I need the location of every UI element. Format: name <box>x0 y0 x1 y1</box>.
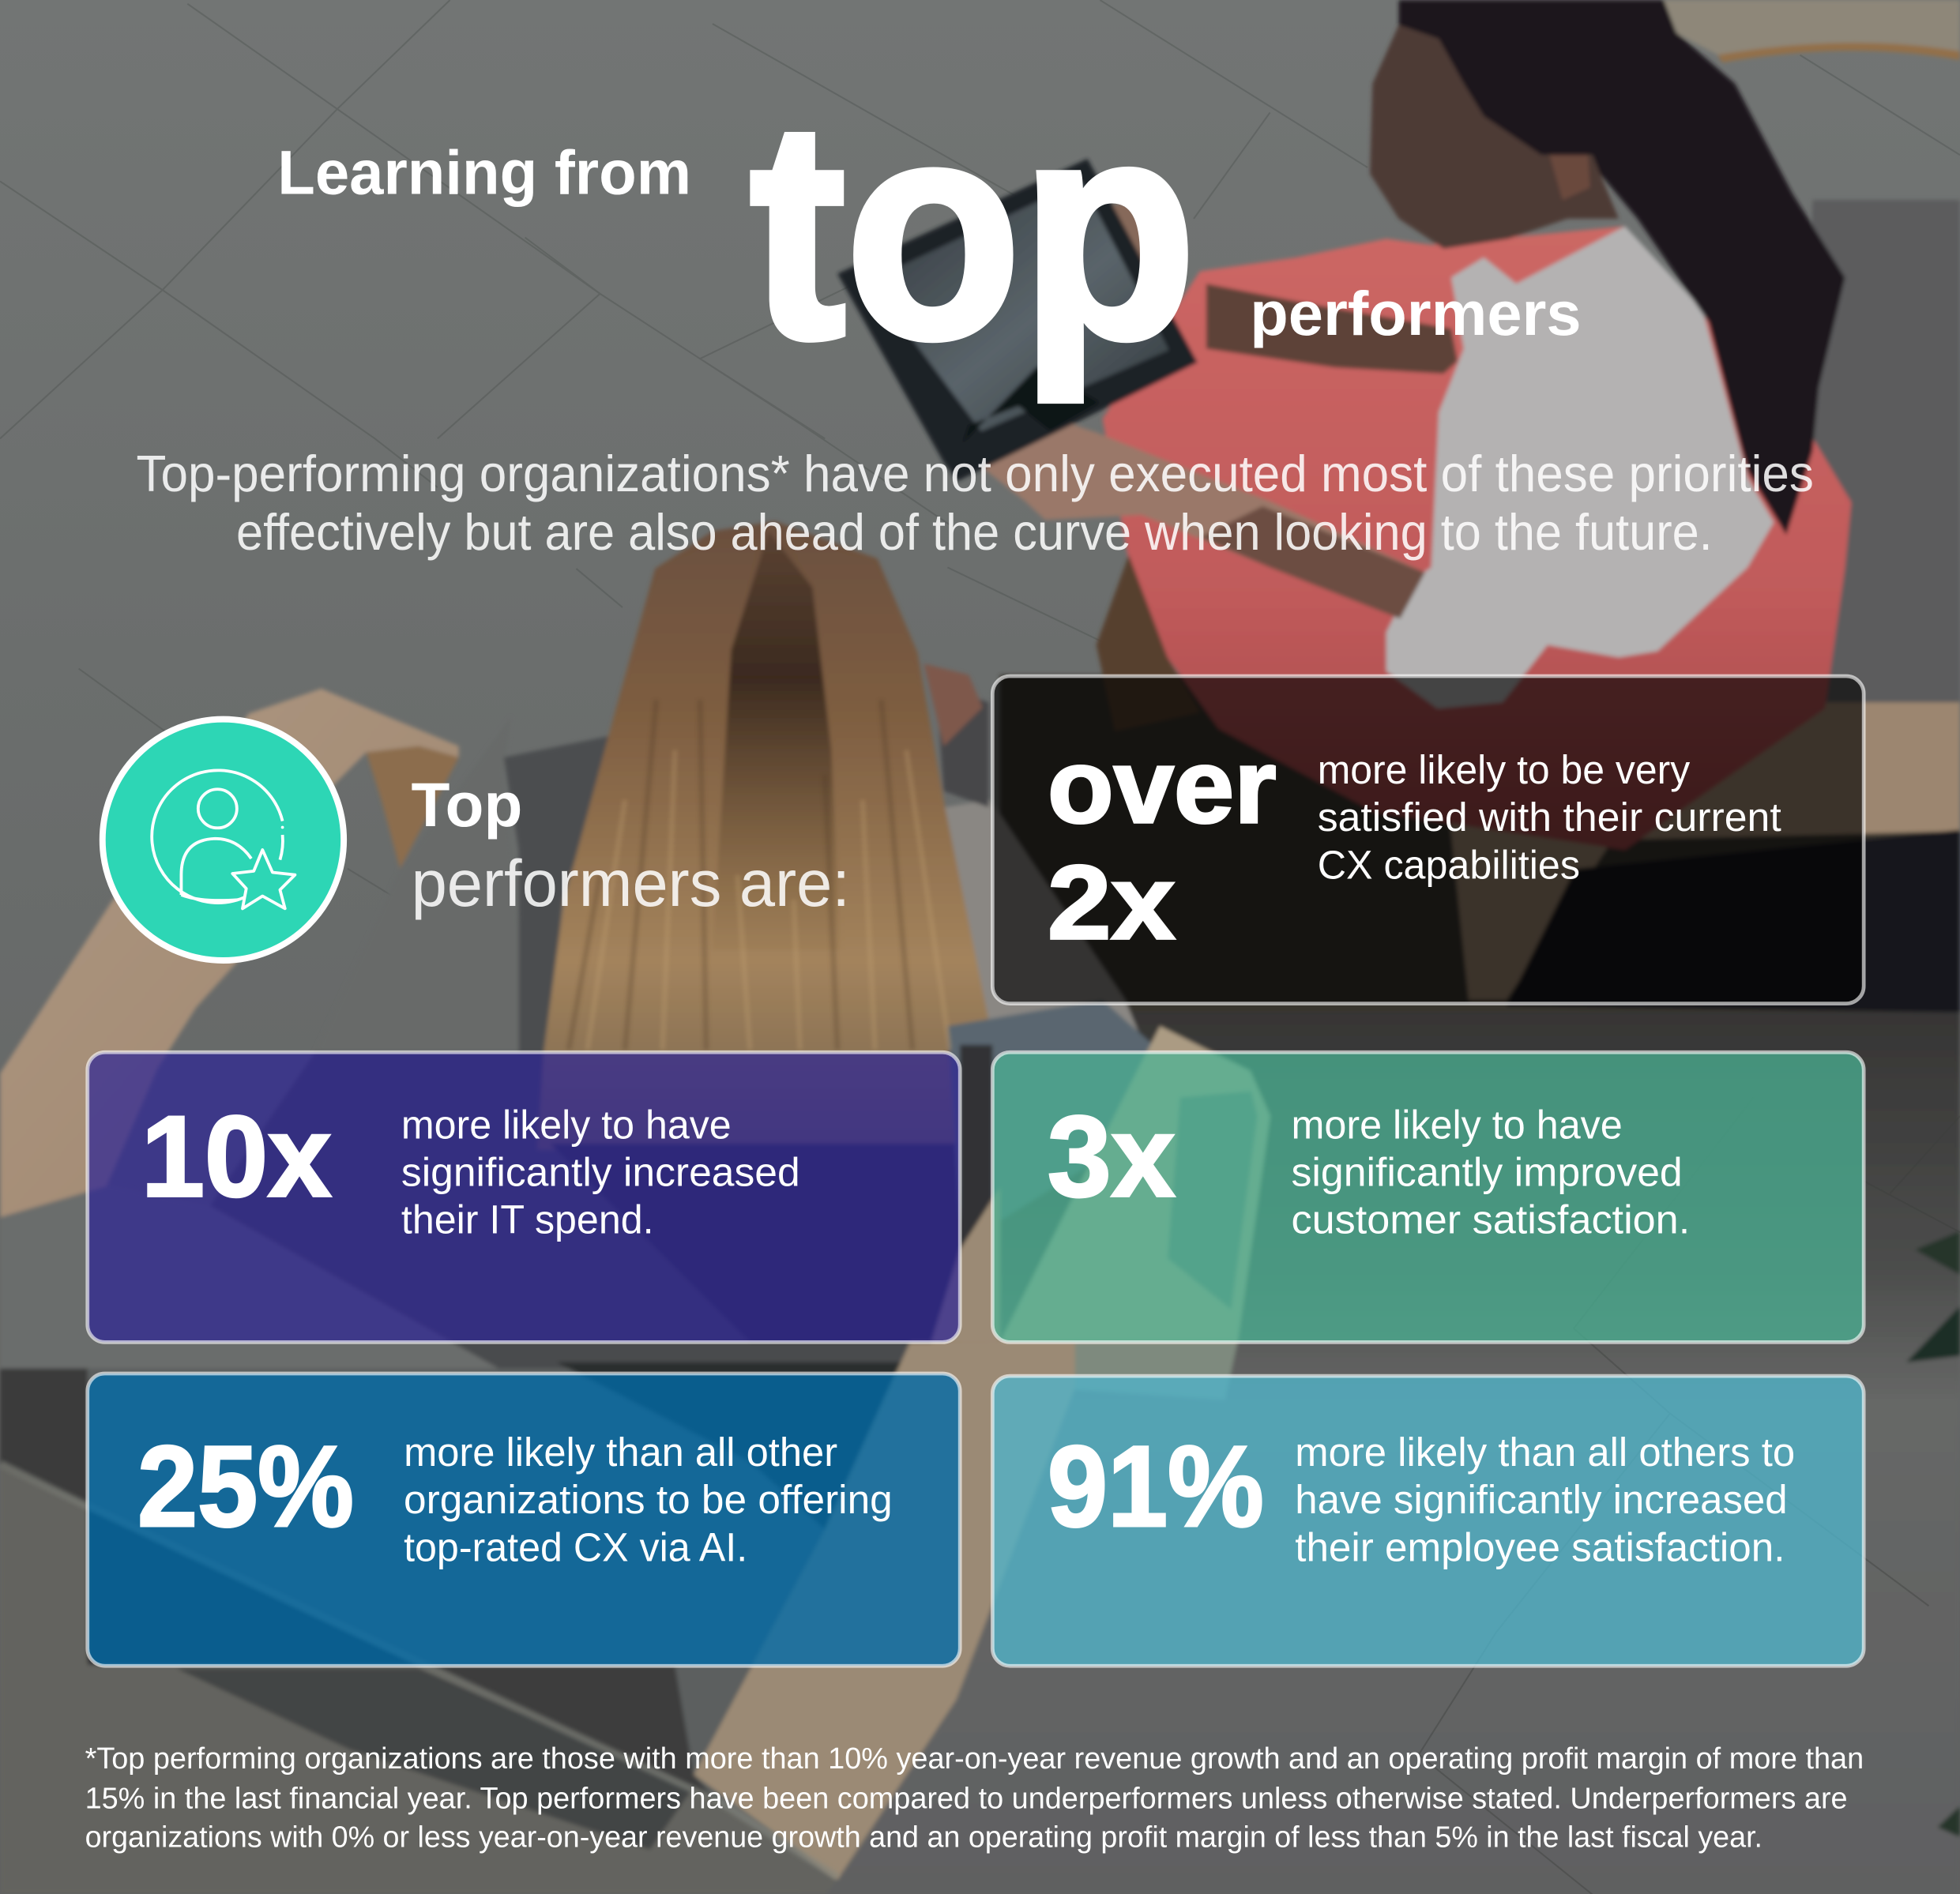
panel: 91%: their employee satisfaction. <box>1295 1524 1785 1569</box>
panel: 10x: significantly increased <box>401 1150 800 1195</box>
panel: over 2x <box>992 676 1864 1004</box>
panel: over 2x: satisfied with their current <box>1318 795 1781 840</box>
footnote <box>85 1742 1864 1855</box>
intro text: effectively but are also ahead of the curve when looking to the future. <box>236 503 1713 561</box>
intro text <box>136 445 1814 561</box>
title: performers <box>1250 278 1582 348</box>
footnote: *Top performing organizations are those with more than 10% year-on-year revenue growth and an operating profit margin of more than <box>85 1742 1864 1776</box>
panel: 10x: their IT spend. <box>401 1197 654 1242</box>
panel: over 2x: over <box>1048 728 1276 845</box>
heading: top performers are: performers are: <box>412 846 850 920</box>
panel: 3x: more likely to have <box>1291 1102 1623 1147</box>
panel: over 2x: more likely to be very <box>1318 747 1691 792</box>
icon: person with star <box>103 720 344 960</box>
panel: 91%: more likely than all others to <box>1295 1430 1795 1475</box>
panel: 91% <box>992 1376 1864 1666</box>
panel: 91%: 91% <box>1048 1422 1264 1550</box>
panel: 10x <box>88 1052 960 1342</box>
footnote: organizations with 0% or less year-on-year revenue growth and an operating profit margin of less than 5% in the last fiscal year. <box>85 1821 1762 1855</box>
panel: 25%: 25% <box>137 1422 354 1550</box>
panel: 10x: 10x <box>141 1092 331 1220</box>
panel: 25%: more likely than all other <box>404 1430 837 1475</box>
title <box>277 59 1582 404</box>
panel: over 2x: 2x <box>1048 844 1175 961</box>
panel: over 2x: CX capabilities <box>1318 842 1580 887</box>
panel: 3x: customer satisfaction. <box>1291 1197 1690 1242</box>
panel: 3x: significantly improved <box>1291 1150 1683 1195</box>
panel: 10x: more likely to have <box>401 1102 732 1147</box>
panel: 3x <box>992 1052 1864 1342</box>
panel: 25% <box>88 1374 960 1666</box>
panel: 91%: have significantly increased <box>1295 1477 1788 1522</box>
heading: top performers are: Top <box>412 769 522 840</box>
panel: 25%: organizations to be offering <box>404 1477 893 1522</box>
title: top <box>750 59 1196 404</box>
footnote: 15% in the last financial year. Top performers have been compared to underperformers unless otherwise stated. Underperformers are <box>85 1783 1848 1816</box>
panel: 3x: 3x <box>1048 1092 1175 1220</box>
intro text: Top-performing organizations* have not only executed most of these priorities <box>136 445 1814 502</box>
panel: 25%: top-rated CX via AI. <box>404 1524 747 1569</box>
title: Learning from <box>277 137 691 207</box>
heading: top performers are <box>412 769 850 920</box>
